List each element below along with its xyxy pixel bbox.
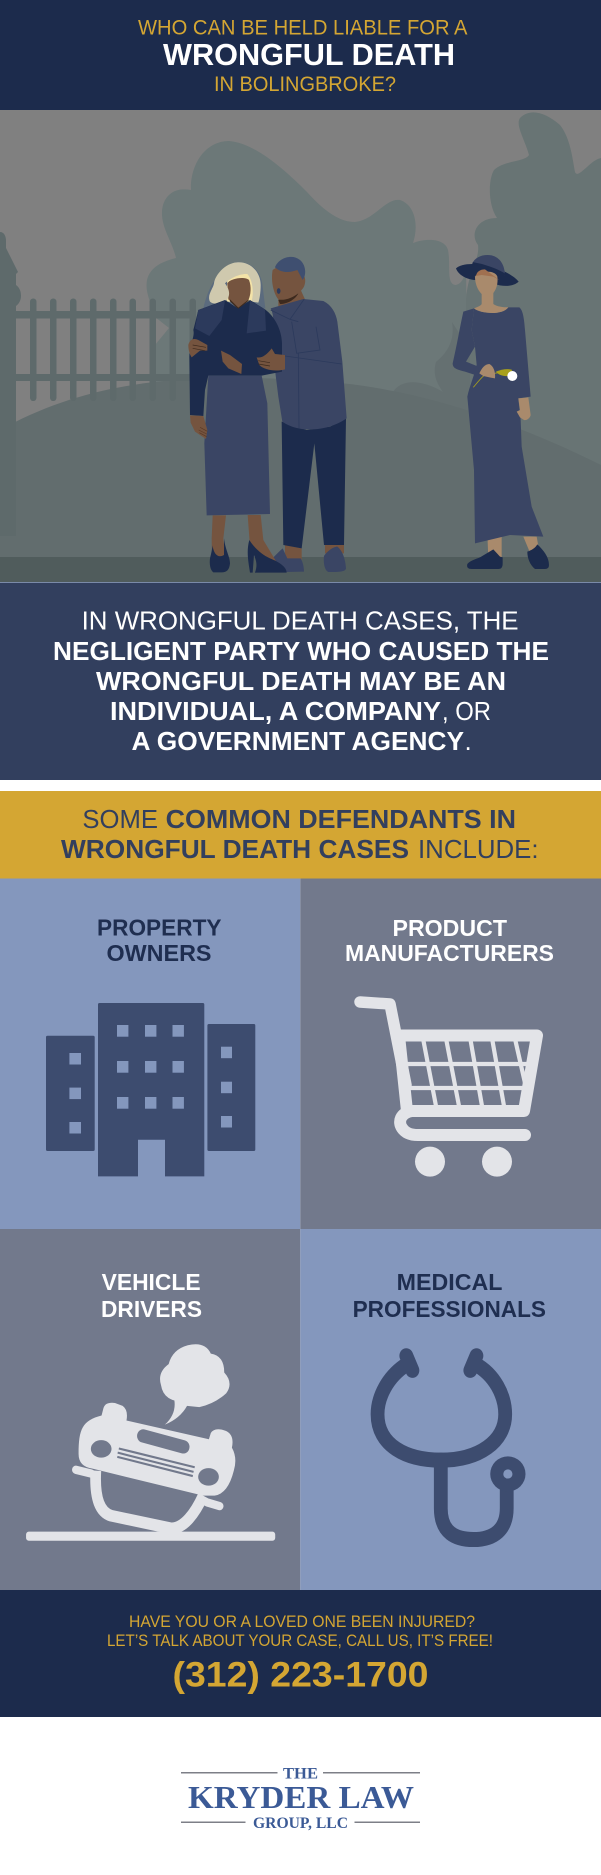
statement line 2: NEGLIGENT PARTY WHO CAUSED THE: [53, 636, 549, 666]
title line: in Bolingbroke: IN BOLINGBROKE?: [214, 73, 396, 96]
man's hands: [188, 339, 285, 371]
heading line 2: WRONGFUL DEATH CASES: [61, 834, 409, 864]
panel: common defendants heading: [0, 791, 601, 878]
panel: property owners: [0, 878, 300, 1229]
heading: medical professionals: MEDICAL: [397, 1269, 503, 1295]
heading: vehicle drivers: DRIVERS: [101, 1296, 202, 1322]
logo: The Kryder Law Group: [181, 1766, 420, 1832]
illustration: mourners by a fence: [0, 110, 601, 583]
statement line 4: INDIVIDUAL, A COMPANY: [110, 696, 441, 726]
ground: [0, 557, 601, 582]
icon: overturned car with smoke: [26, 1344, 275, 1541]
call to action invitation: LET’S TALK ABOUT YOUR CASE, CALL US, IT’S FREE!: [107, 1631, 493, 1650]
logo: The Kryder Law Group: KRYDER LAW: [188, 1779, 414, 1815]
panel: product manufacturers: [300, 878, 601, 1229]
figure: older woman: [189, 262, 287, 573]
icon: shopping cart: [360, 1002, 537, 1177]
heading: property owners: [97, 915, 222, 966]
heading: medical professionals: [353, 1269, 546, 1322]
icon: office buildings: [46, 1003, 255, 1176]
phone number: (312) 223-1700: [172, 1656, 428, 1695]
heading: property owners: OWNERS: [106, 940, 212, 966]
hill: [0, 378, 601, 560]
title line: who can be held liable: WHO CAN BE HELD LIABLE FOR A: [138, 16, 468, 40]
panel: medical professionals: [300, 1229, 601, 1590]
heading line 1: COMMON DEFENDANTS IN: [166, 804, 516, 834]
title line: wrongful death: WRONGFUL DEATH: [163, 38, 455, 72]
panel: call to action: [0, 1590, 601, 1717]
heading: product manufacturers: MANUFACTURERS: [345, 940, 554, 966]
heading: medical professionals: PROFESSIONALS: [353, 1296, 546, 1322]
fence: [0, 232, 196, 536]
heading line 1: SOME: [82, 804, 158, 834]
statement line 5: A GOVERNMENT AGENCY: [132, 726, 464, 756]
panel: vehicle drivers: [0, 1229, 300, 1590]
heading: product manufacturers: [345, 915, 554, 966]
header panel: [0, 0, 601, 110]
heading: property owners: PROPERTY: [97, 915, 222, 941]
logo: The Kryder Law Group: THE: [283, 1766, 318, 1782]
panel: negligent party statement: [0, 583, 601, 780]
statement line 3: WRONGFUL DEATH MAY BE AN: [96, 666, 506, 696]
statement line 1: IN WRONGFUL DEATH CASES, THE: [82, 606, 519, 636]
background trees: [147, 112, 601, 560]
fence post: [0, 232, 21, 536]
heading: vehicle drivers: VEHICLE: [102, 1269, 201, 1295]
figure: woman in hat holding flower: [453, 255, 549, 569]
logo: The Kryder Law Group: GROUP, LLC: [253, 1815, 348, 1832]
heading: product manufacturers: PRODUCT: [392, 915, 507, 941]
heading: vehicle drivers: [101, 1269, 202, 1322]
figure: man: [255, 257, 347, 573]
heading line 2: INCLUDE:: [418, 834, 538, 864]
statement line 5: .: [464, 726, 472, 756]
call to action question: HAVE YOU OR A LOVED ONE BEEN INJURED?: [129, 1612, 475, 1631]
statement line 4: , OR: [442, 696, 491, 726]
icon: stethoscope: [378, 1356, 526, 1540]
figures: [188, 255, 549, 573]
